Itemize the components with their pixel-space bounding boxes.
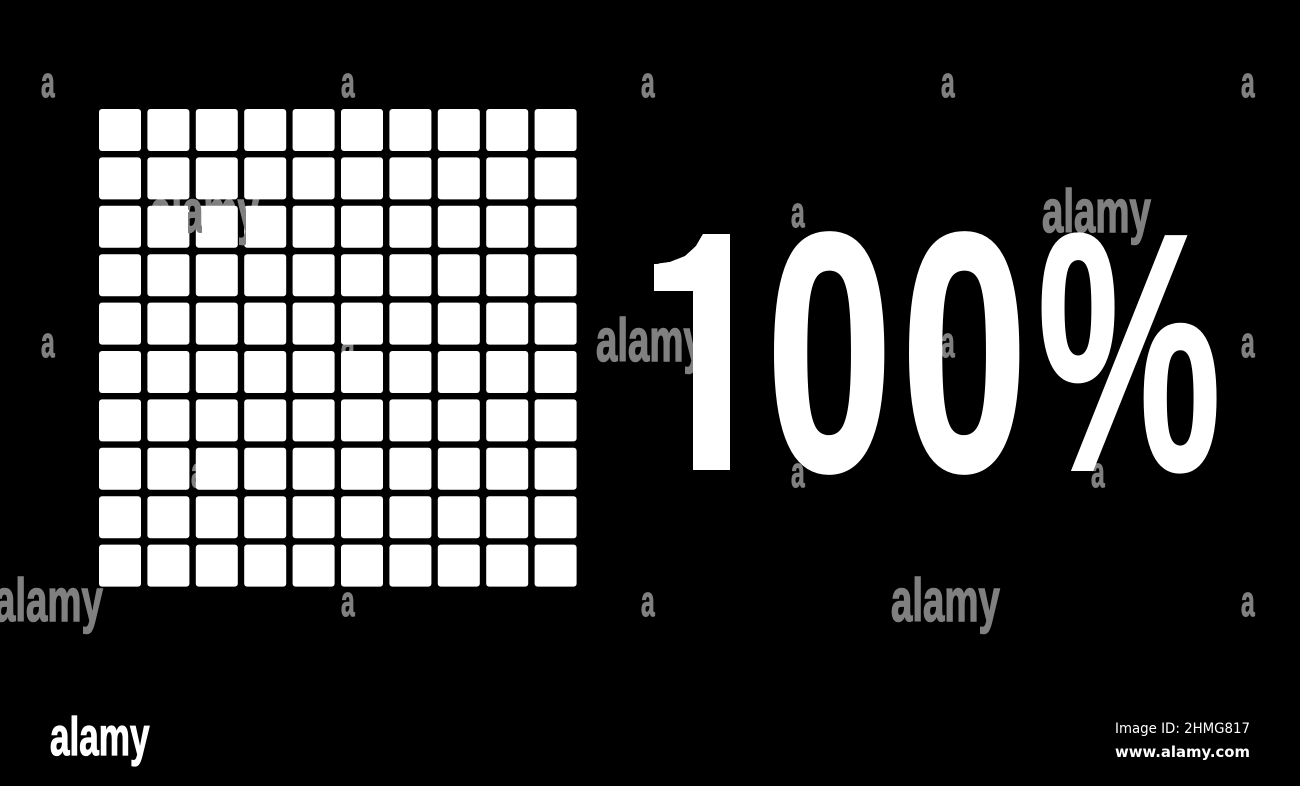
watermark: repeated small letters: a xyxy=(191,448,206,497)
watermark: repeated small letters: a xyxy=(1091,448,1106,497)
watermark: repeated small letters: a xyxy=(791,188,806,237)
logo: alamy: alamy xyxy=(50,706,150,767)
watermark: repeated small letters: a xyxy=(341,577,356,626)
big percentage value: 1 xyxy=(637,162,773,542)
big percentage value: 0 xyxy=(766,163,893,543)
watermark fragments over the grid: alamy xyxy=(150,177,259,245)
big percentage value: % xyxy=(1037,162,1221,542)
watermark: repeated small letters: a xyxy=(41,58,56,107)
waffle chart: 10 by 10 grid of squares, all filled xyxy=(99,109,577,587)
watermark: repeated small letters: a xyxy=(941,58,956,107)
website address: www.alamy.com xyxy=(1115,743,1250,761)
watermark: large alamy wordmarks: alamy xyxy=(1042,177,1151,245)
watermark: repeated small letters: a xyxy=(941,318,956,367)
watermark: repeated small letters: a xyxy=(1241,577,1256,626)
watermark: repeated small letters: a xyxy=(341,58,356,107)
watermark: repeated small letters xyxy=(41,58,1256,626)
image id: Image ID: 2HMG817 xyxy=(1115,721,1250,737)
watermark: repeated small letters: a xyxy=(41,318,56,367)
watermark: repeated small letters: a xyxy=(791,448,806,497)
watermark: large alamy wordmarks xyxy=(0,177,1151,634)
watermark: large alamy wordmarks: alamy xyxy=(596,306,705,374)
watermark: large alamy wordmarks: alamy xyxy=(150,177,259,245)
big percentage value xyxy=(654,231,1217,475)
big percentage value: 0 xyxy=(901,163,1028,543)
watermark: repeated small letters: a xyxy=(1241,318,1256,367)
watermark: large alamy wordmarks: alamy xyxy=(891,566,1000,634)
watermark: repeated small letters: a xyxy=(341,318,356,367)
watermark: repeated small letters: a xyxy=(641,58,656,107)
watermark: repeated small letters: a xyxy=(641,577,656,626)
watermark: repeated small letters: a xyxy=(1241,58,1256,107)
